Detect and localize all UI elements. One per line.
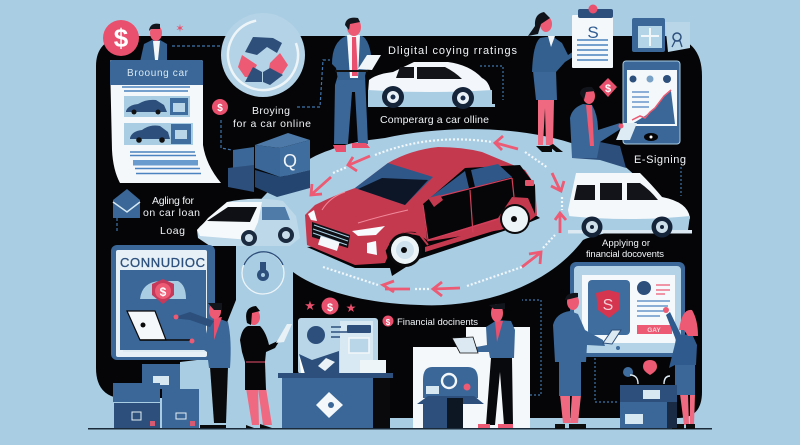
- person: woman with tablet: [240, 306, 292, 428]
- side black panel: [423, 165, 535, 240]
- illustration: central red car: [305, 147, 540, 276]
- icon: small dollar: [212, 99, 228, 115]
- heading: document title: Brooung car: [127, 68, 189, 79]
- black backdrop panel: [96, 36, 702, 418]
- front panel black wheel arch: [385, 232, 429, 276]
- label: applying financial documents: financial docovents: [586, 249, 664, 260]
- light blue central ellipse and column: [180, 129, 642, 428]
- icon: clipboard: [572, 4, 613, 68]
- person: woman pointing at monitor: [663, 307, 698, 429]
- panel: monitor: GAY: [647, 327, 661, 334]
- panel: monitor: S: [603, 297, 613, 314]
- label: browsing online: Broying: [252, 105, 290, 117]
- ground shadow: [307, 205, 540, 268]
- illustration: white car comparing: [368, 62, 495, 109]
- person: man with tablet: [553, 293, 621, 429]
- icon: star: ✶: [175, 23, 185, 35]
- panel: white backing with man and box: [413, 327, 530, 428]
- headlights: [352, 226, 385, 236]
- icon: dollar badge top left: [103, 20, 139, 56]
- person: man at kiosk: [172, 303, 231, 428]
- icon: clipboard: S: [587, 23, 599, 42]
- icon: diamond dollar: $: [605, 83, 611, 95]
- windshield: [355, 163, 433, 205]
- icons: stars and dollar: ★: [346, 301, 356, 315]
- illustration: desk with screen: [278, 318, 393, 428]
- icon: settings card: [632, 18, 690, 52]
- label: applying for car loan: [143, 195, 200, 237]
- illustration: white van: [568, 173, 692, 238]
- sill: [425, 224, 500, 252]
- illustration: small white car: [197, 199, 300, 246]
- ground line: [88, 428, 712, 430]
- person: small man behind document: [140, 24, 167, 62]
- label: e-signing: E-Signing: [634, 154, 686, 166]
- text lines: [122, 87, 201, 174]
- panel: monitor: [570, 262, 685, 357]
- icon: tablet with chart: [623, 61, 680, 144]
- label: applying for car loan: on car loan: [143, 207, 200, 219]
- label: comparing a car online: Comperarg a car olline: [380, 114, 489, 126]
- grille: [312, 222, 350, 248]
- hood highlight: [322, 192, 408, 223]
- dotted connector right: [522, 167, 681, 402]
- door trim: [423, 178, 514, 240]
- label: applying financial documents: [586, 238, 664, 260]
- dotted connector car: [480, 66, 503, 100]
- panel: browsing document: [110, 60, 221, 183]
- icon: envelope: [113, 189, 140, 218]
- icons: stars and dollar: $: [327, 302, 333, 314]
- arrows: dotted loop around car: [311, 136, 566, 296]
- icon: dollar badge top left: $: [114, 23, 129, 53]
- label: applying financial documents: Applying or: [602, 238, 650, 249]
- heading: kiosk title: CONNUDIOC: [120, 255, 205, 270]
- mirror: [428, 195, 443, 207]
- illustration: stacked boxes: Q: [283, 151, 297, 171]
- panel: connection kiosk: [111, 245, 215, 360]
- label: financial documents: Financial docinents: [397, 317, 478, 328]
- listing row one: [124, 96, 190, 117]
- person: woman with clipboard: [528, 12, 581, 152]
- label: digital ratings: Dligital coying rratings: [388, 45, 518, 57]
- label: applying for car loan: Loag: [160, 225, 185, 237]
- icon: lock circle: [242, 252, 284, 294]
- icons: stars and dollar: $: [386, 318, 391, 327]
- illustration: stacked boxes: [228, 133, 310, 197]
- person: man with laptop: [452, 303, 515, 428]
- body shell: [305, 147, 537, 265]
- icon: recycling circle: [218, 10, 308, 100]
- illustration: mic and pin: [623, 360, 670, 384]
- listing row two: [124, 123, 193, 145]
- wheels: [388, 233, 422, 267]
- label: applying for car loan: Agling for: [152, 195, 194, 207]
- label: browsing online: for a car online: [233, 118, 311, 130]
- panel: connection kiosk: $: [160, 285, 167, 299]
- person: seated man with laptop: [570, 87, 637, 168]
- person: standing man with laptop: [332, 18, 381, 152]
- icons: stars and dollar: ★: [304, 298, 316, 313]
- icon: diamond dollar: [599, 78, 617, 97]
- icons: stars and dollar: [304, 298, 394, 327]
- label: browsing online: [233, 105, 311, 130]
- dotted connector: [117, 46, 330, 232]
- icon: small dollar: $: [217, 103, 223, 114]
- illustration: lower left boxes: [113, 364, 199, 428]
- side windows: [428, 171, 469, 199]
- illustration: lower right box: [620, 385, 677, 428]
